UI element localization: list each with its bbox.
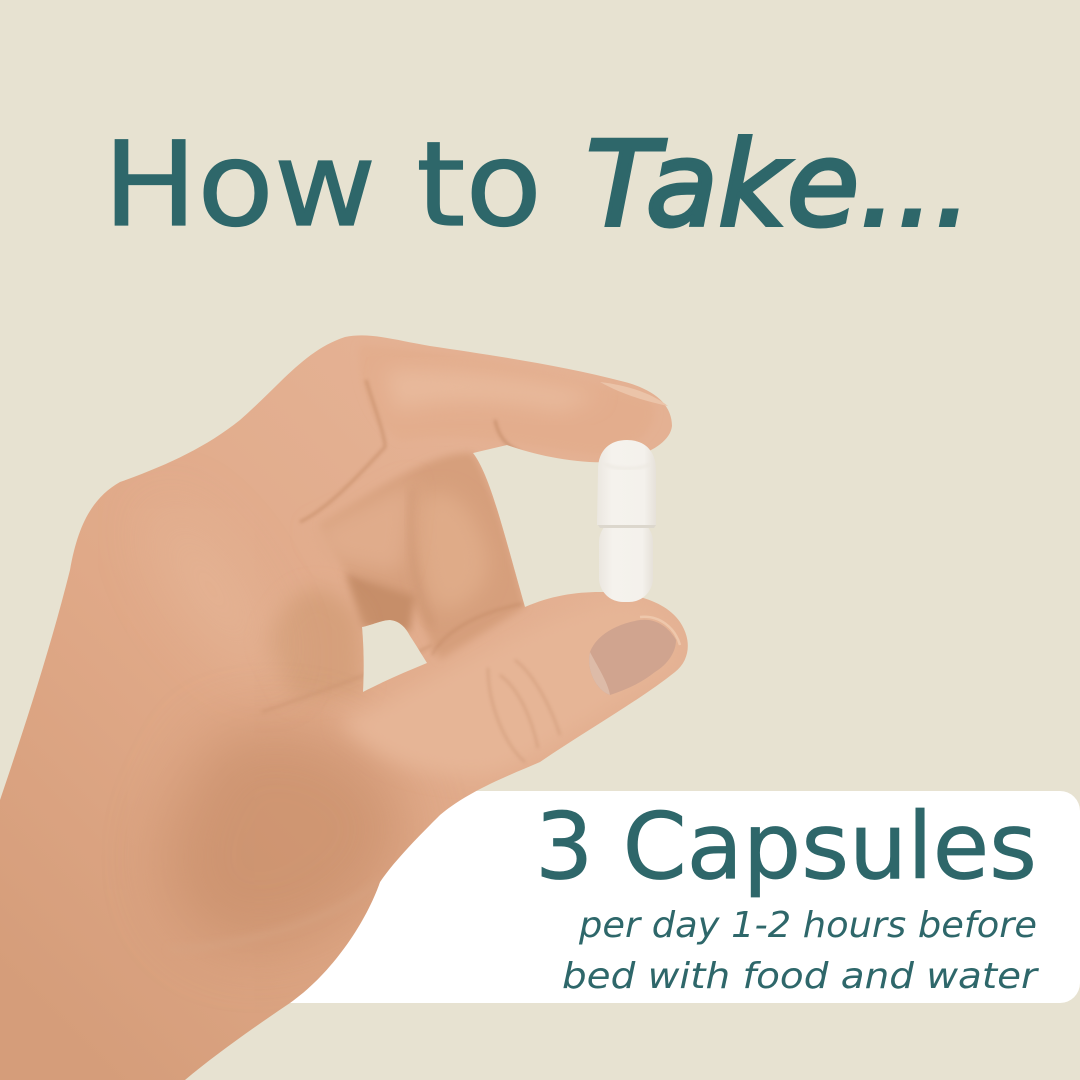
dosage details: per day 1-2 hours before [578, 905, 1037, 946]
thumb highlight and creases [348, 668, 548, 772]
dosage heading: 3 Capsules [535, 793, 1037, 900]
title: How to Take... [103, 116, 972, 253]
middle finger shading [346, 452, 525, 658]
lower palm darkening [165, 726, 410, 950]
hand holding capsule [0, 320, 700, 1080]
dosage details [562, 905, 1039, 997]
index fingernail [600, 382, 668, 406]
thumbnail [589, 620, 676, 695]
palm shadow area [345, 572, 415, 632]
wrist fold [170, 880, 382, 950]
capsule [597, 440, 656, 602]
finger crease [411, 490, 432, 625]
title: How to Take...: Take... [586, 116, 972, 253]
crease under index knuckle [300, 380, 385, 522]
dosage details: bed with food and water [562, 956, 1039, 997]
panel: dosage callout [240, 791, 1080, 1003]
index finger highlight [359, 345, 654, 455]
title: How to Take...: How to [103, 116, 542, 253]
